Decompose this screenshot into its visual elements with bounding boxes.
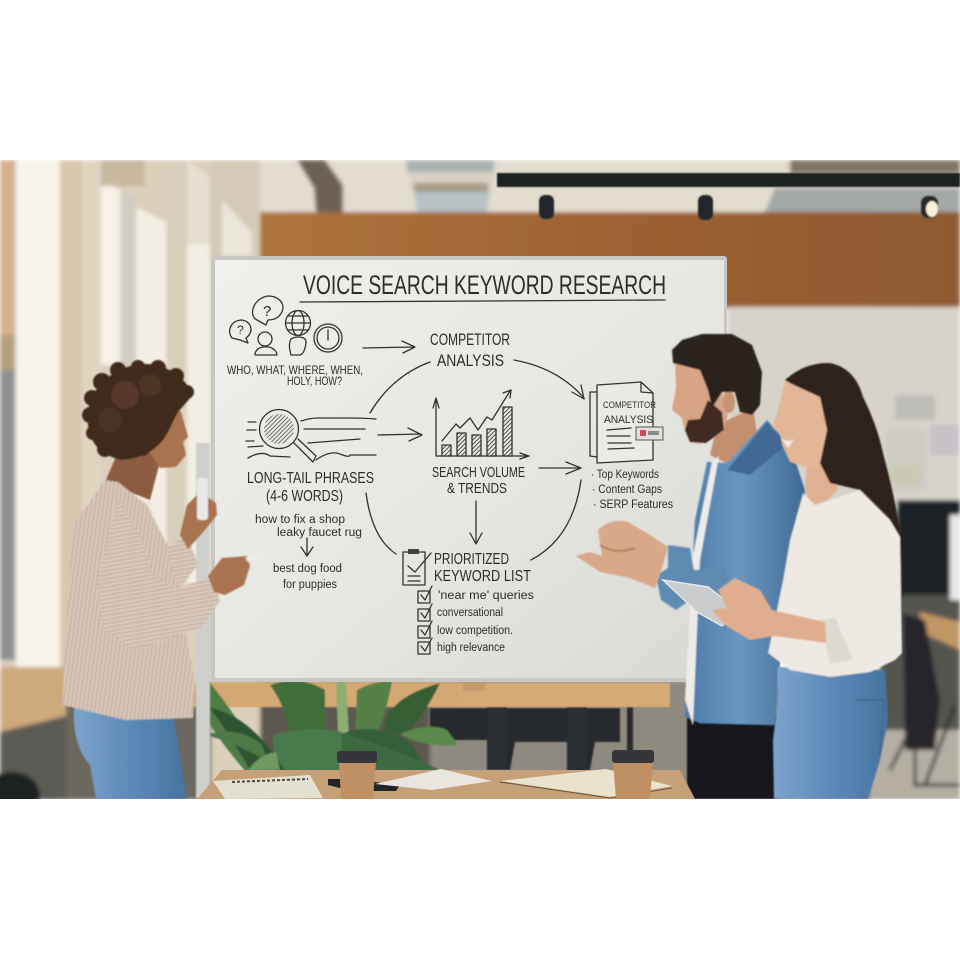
checklist — [418, 586, 534, 654]
hands gesturing — [576, 521, 668, 588]
wall posters — [885, 395, 960, 490]
neck — [805, 440, 838, 515]
wood beam — [257, 212, 960, 308]
left wall base — [0, 160, 260, 800]
plant leaves — [196, 680, 458, 772]
heading: prioritized keyword list — [434, 551, 531, 585]
checklist: 'near me' queries — [438, 590, 534, 602]
coffee cup left — [337, 751, 377, 799]
text: long-tail phrases — [247, 470, 374, 505]
heading: prioritized keyword list: KEYWORD LIST — [434, 568, 531, 585]
arrow: volume to competitor doc — [539, 462, 581, 474]
checklist: low competition. — [437, 625, 513, 637]
text: long-tail examples — [255, 514, 362, 591]
arm and hands — [712, 578, 826, 643]
jeans — [74, 708, 187, 799]
arrow: list curve to doc — [531, 480, 581, 560]
text: question words: HOLY, HOW? — [287, 374, 342, 388]
rear table top — [190, 682, 458, 707]
checklist: high relevance — [437, 642, 505, 654]
hand gap shadow — [600, 545, 635, 551]
white blouse — [768, 490, 902, 677]
rear chairs and legs — [430, 708, 620, 770]
heading: competitor analysis: ANALYSIS — [437, 351, 504, 370]
neck — [105, 450, 163, 500]
hair — [82, 360, 194, 460]
text: competitor bullets: · Top Keywords — [591, 469, 659, 481]
spiral dots — [232, 779, 308, 782]
text: search volume and trends: SEARCH VOLUME — [432, 464, 525, 481]
person: woman left with sweater — [62, 360, 263, 799]
bar chart: search volume — [433, 390, 529, 459]
black rail — [497, 173, 960, 187]
back tables and plant — [190, 680, 670, 772]
rear chairs — [903, 613, 940, 750]
denim shirt — [685, 420, 805, 725]
tablet — [663, 580, 738, 626]
right rear tables — [920, 612, 960, 650]
spot lit — [921, 196, 938, 218]
marker pointing — [245, 552, 263, 562]
text: long-tail examples: best dog food — [273, 563, 342, 575]
hvac vent — [406, 160, 494, 217]
hair — [672, 334, 762, 415]
text: competitor bullets: · Content Gaps — [592, 484, 662, 496]
face — [772, 381, 827, 470]
trousers — [687, 715, 779, 799]
dark ceiling right — [790, 160, 960, 174]
text: long-tail examples: how to fix a shop — [255, 514, 345, 526]
arrow: analysis curve to document — [514, 360, 584, 399]
sweater body — [62, 480, 195, 720]
wall under sill — [62, 705, 214, 799]
whiteboard frame — [211, 256, 727, 682]
rear wall — [727, 307, 960, 507]
coffee cup right — [612, 750, 654, 799]
icon: magnifying glass with wavy lines — [246, 410, 376, 462]
arrow: long-tail to volume — [378, 428, 422, 441]
spot left — [539, 195, 554, 219]
desk legs stand pole — [196, 443, 210, 798]
photo scene: whiteboard meeting — [0, 160, 960, 799]
hand raised — [180, 492, 217, 549]
ceiling — [250, 160, 960, 215]
desk top — [197, 770, 695, 799]
arrow: long-tail curve to analysis — [370, 362, 430, 413]
white t-shirt — [685, 456, 719, 725]
text: search volume and trends: & TRENDS — [447, 480, 507, 497]
arrow: questions to competitor analysis — [363, 341, 415, 353]
icon: clipboard with check — [403, 549, 431, 585]
open book — [500, 769, 672, 797]
phone — [328, 779, 400, 791]
near sleeve — [97, 499, 220, 650]
ear — [723, 391, 735, 413]
face — [672, 360, 728, 444]
chair back — [0, 770, 42, 799]
hair — [785, 363, 904, 600]
icon: competitor analysis document: ANALYSIS — [604, 414, 653, 426]
face — [148, 400, 188, 468]
title: VOICE SEARCH KEYWORD RESEARCH — [303, 270, 666, 300]
spot middle — [698, 195, 713, 220]
text: long-tail examples: for puppies — [283, 579, 337, 591]
icon: competitor analysis document — [590, 382, 663, 463]
window sill — [0, 667, 66, 732]
person: woman right with white blouse — [712, 363, 904, 799]
icon: competitor analysis document: COMPETITOR — [603, 400, 656, 411]
text: long-tail examples: leaky faucet rug — [277, 527, 362, 539]
cuff shade — [820, 617, 853, 664]
hand with marker — [208, 556, 250, 595]
white top — [133, 497, 165, 550]
jeans pocket — [856, 700, 884, 755]
heading: competitor analysis: COMPETITOR — [430, 330, 510, 349]
text: question words: WHO, WHAT, WHERE, WHEN, — [227, 363, 363, 377]
panel: whiteboard surface — [215, 260, 724, 678]
paper sheet — [375, 769, 492, 790]
background: office room — [0, 160, 960, 818]
heading: prioritized keyword list: PRIORITIZED — [434, 551, 509, 568]
dark rear right — [897, 500, 960, 615]
smile — [781, 438, 795, 448]
arrow: phrases curve to list — [366, 493, 396, 554]
icon: question bubbles, person, globe, clock: ? — [237, 323, 244, 337]
shirt shade — [727, 422, 786, 475]
text: long-tail phrases: LONG-TAIL PHRASES — [247, 470, 374, 487]
right ceiling duct — [765, 188, 960, 214]
text: competitor bullets: · SERP Features — [593, 499, 673, 511]
sleeve forearm — [656, 545, 735, 610]
arrow: volume to list — [470, 501, 482, 544]
stand pole — [196, 443, 210, 798]
checklist: conversational — [437, 607, 503, 619]
marker held up — [197, 478, 208, 520]
jeans — [773, 667, 888, 799]
icon: question bubbles, person, globe, clock: ? — [263, 303, 271, 320]
person: man with denim shirt — [576, 334, 805, 799]
ceiling track light — [497, 173, 960, 220]
rear lower room — [210, 680, 960, 800]
text: long-tail phrases: (4-6 WORDS) — [266, 488, 343, 505]
air duct — [297, 160, 343, 212]
icon: question bubbles, person, globe, clock — [230, 296, 342, 355]
raised sleeve — [167, 535, 198, 590]
text: search volume and trends — [432, 464, 525, 497]
beard — [685, 400, 724, 443]
text: question words — [227, 366, 362, 386]
text: competitor bullets — [591, 469, 673, 511]
tall window light — [16, 160, 60, 667]
heading: competitor analysis — [430, 334, 510, 366]
spiral notebook — [213, 775, 323, 799]
neck — [710, 408, 758, 465]
front desk — [197, 750, 695, 799]
